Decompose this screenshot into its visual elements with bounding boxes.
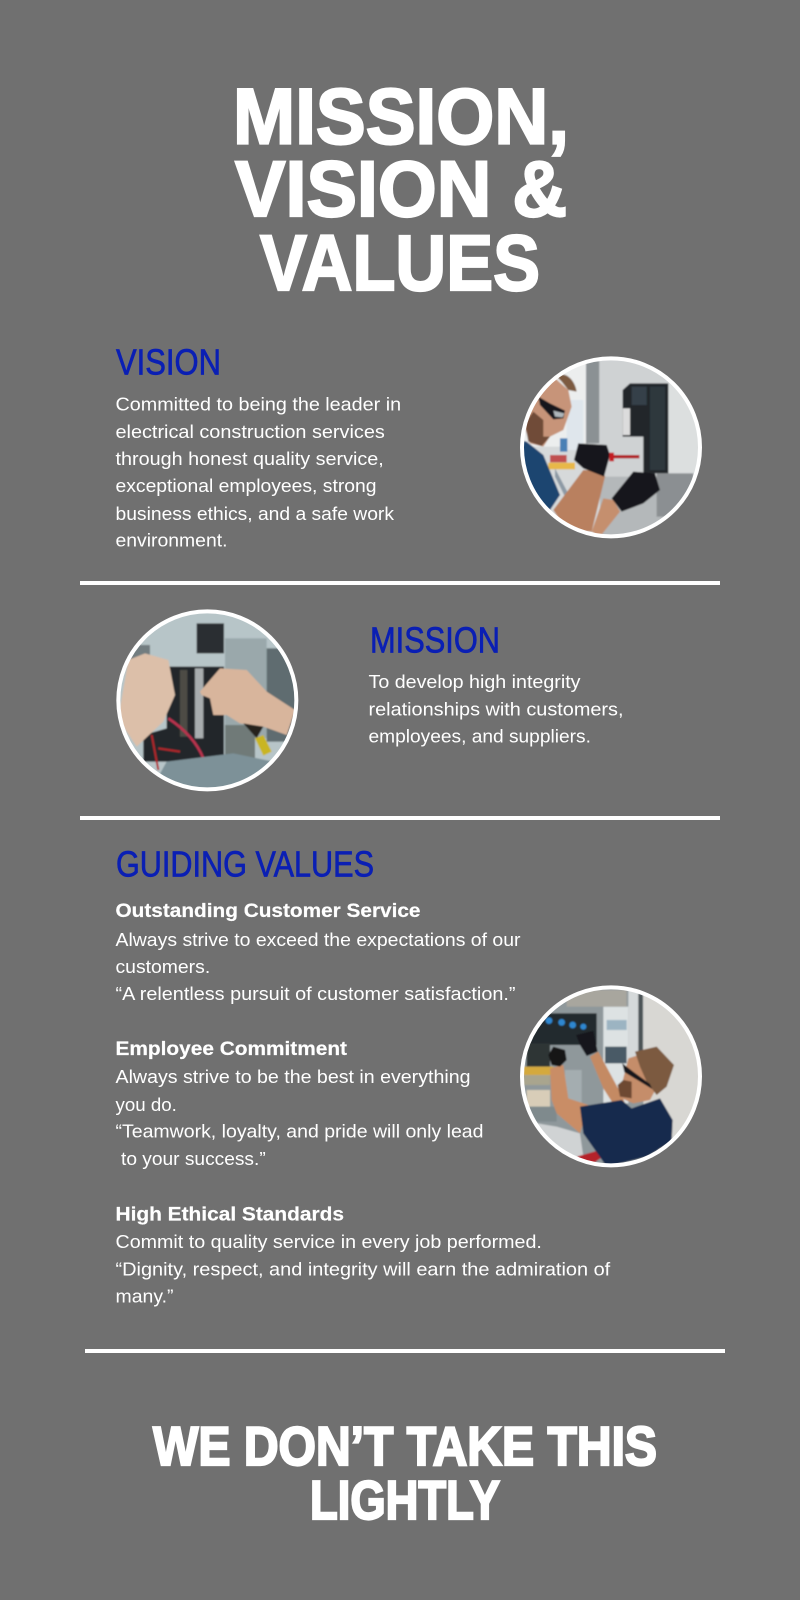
- divider: [80, 816, 720, 820]
- text block: mission statement: relationships with customers,: [368, 698, 624, 720]
- divider: [85, 1349, 725, 1353]
- divider: [80, 581, 720, 585]
- text block: vision statement: business ethics, and a safe work: [116, 503, 395, 524]
- value: employee commitment: you do.: [116, 1094, 177, 1115]
- text block: vision statement: electrical construction services: [116, 421, 385, 442]
- value: employee commitment: to your success.”: [121, 1148, 266, 1169]
- title: [233, 72, 569, 307]
- value: outstanding customer service: [116, 901, 520, 1004]
- closing tagline: LIGHTLY: [310, 1469, 500, 1531]
- heading: guiding values: GUIDING VALUES: [116, 844, 374, 885]
- photo: hands working on breaker panel: [113, 605, 303, 795]
- value: employee commitment: Always strive to be the best in everything: [116, 1066, 470, 1087]
- panel: mission: [113, 605, 624, 795]
- closing tagline: WE DON’T TAKE THIS: [153, 1415, 657, 1477]
- text block: vision statement: environment.: [116, 530, 228, 551]
- title: VALUES: [260, 218, 540, 307]
- value: outstanding customer service: “A relentless pursuit of customer satisfaction.”: [116, 983, 516, 1004]
- photo: electrician at control cabinet: [517, 983, 707, 1173]
- photo: electrician with screwdriver: [517, 353, 707, 543]
- value: outstanding customer service: Always strive to exceed the expectations of our: [116, 929, 520, 950]
- text block: vision statement: exceptional employees, strong: [116, 475, 376, 496]
- value: employee commitment: Employee Commitment: [116, 1039, 348, 1060]
- text block: mission statement: To develop high integrity: [368, 671, 581, 692]
- text block: vision statement: Committed to being the leader in: [116, 394, 401, 415]
- text block: vision statement: [116, 394, 401, 551]
- value: employee commitment: “Teamwork, loyalty, and pride will only lead: [116, 1121, 484, 1142]
- value: outstanding customer service: Outstanding Customer Service: [116, 901, 420, 922]
- title: VISION &: [235, 144, 567, 233]
- heading: vision: VISION: [116, 342, 221, 383]
- value: high ethical standards: [116, 1204, 611, 1306]
- closing tagline: [153, 1415, 657, 1531]
- text block: mission statement: employees, and suppliers.: [368, 726, 591, 747]
- panel: guiding values: [116, 844, 707, 1306]
- text block: vision statement: through honest quality service,: [116, 448, 384, 469]
- value: high ethical standards: Commit to quality service in every job performed.: [116, 1231, 542, 1252]
- text block: mission statement: [368, 671, 624, 747]
- heading: mission: MISSION: [370, 620, 500, 661]
- panel: vision: [116, 342, 707, 551]
- value: high ethical standards: many.”: [116, 1286, 174, 1306]
- value: high ethical standards: “Dignity, respect, and integrity will earn the admiration of: [116, 1258, 611, 1280]
- title: MISSION,: [233, 72, 569, 160]
- value: outstanding customer service: customers.: [116, 956, 210, 977]
- value: high ethical standards: High Ethical Standards: [116, 1204, 344, 1226]
- value: employee commitment: [116, 1039, 484, 1169]
